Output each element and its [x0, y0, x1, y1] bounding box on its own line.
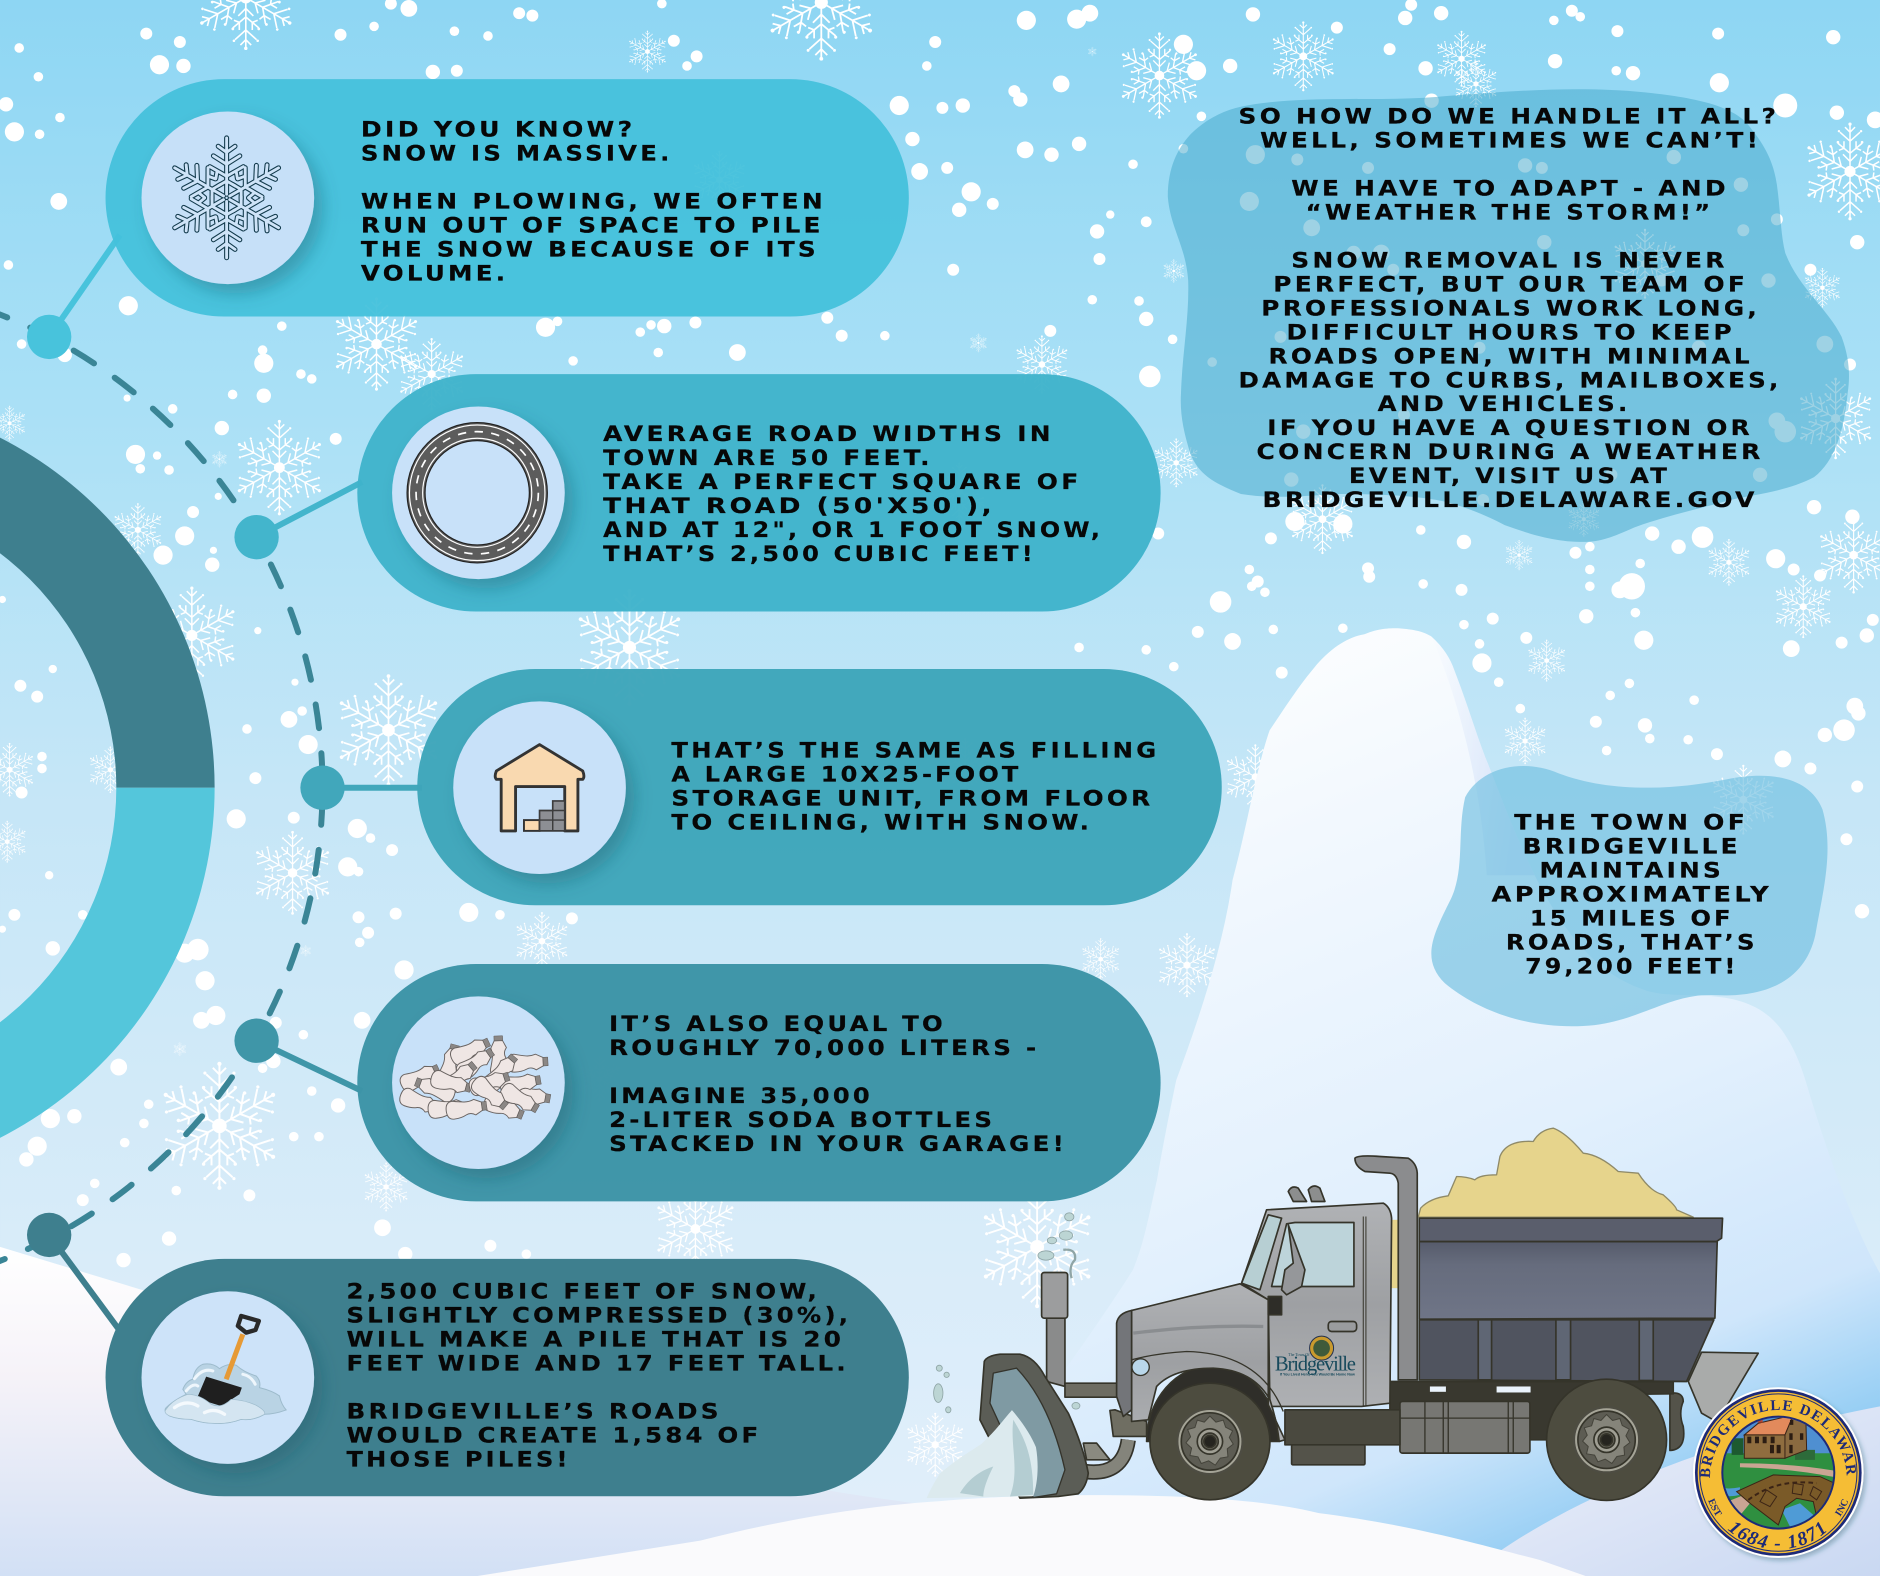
text: road widths: THAT ROAD (50'X50'), — [603, 494, 995, 519]
panel: soda bottles — [357, 964, 1161, 1201]
headlight — [1132, 1359, 1149, 1375]
text: how we handle it: “WEATHER THE STORM!” — [1306, 200, 1713, 225]
panel: road widths — [357, 374, 1161, 611]
seal text est: EST — [1708, 1498, 1722, 1516]
text: storage unit: TO CEILING, WITH SNOW. — [671, 811, 1092, 836]
mirror — [1282, 1225, 1305, 1295]
text: how we handle it: PERFECT, BUT OUR TEAM OF — [1273, 272, 1748, 297]
text: road widths: AVERAGE ROAD WIDTHS IN — [603, 422, 1054, 447]
hopper lower — [1419, 1320, 1714, 1381]
text: how we handle it: DAMAGE TO CURBS, MAILBOXES, — [1239, 368, 1782, 393]
text: soda bottles — [609, 1012, 1067, 1157]
text: town roads: 15 MILES OF — [1530, 907, 1734, 932]
frame and step — [1285, 1410, 1400, 1445]
text: soda bottles: IMAGINE 35,000 — [609, 1084, 873, 1109]
text: did you know — [361, 118, 826, 287]
dump bed rim — [1419, 1218, 1723, 1241]
text: did you know: RUN OUT OF SPACE TO PILE — [361, 214, 824, 239]
text: how we handle it — [1239, 104, 1782, 513]
hydraulic pipe — [1085, 1440, 1128, 1472]
text: did you know: SNOW IS MASSIVE. — [361, 142, 673, 167]
door logo — [1275, 1336, 1356, 1376]
text: did you know: WHEN PLOWING, WE OFTEN — [361, 190, 826, 215]
text: road widths: TAKE A PERFECT SQUARE OF — [603, 470, 1081, 495]
cab — [1242, 1203, 1392, 1406]
text: how we handle it: ROADS OPEN, WITH MINIMAL — [1269, 344, 1753, 369]
yellow load behind cab — [1390, 1220, 1403, 1288]
text: how we handle it: IF YOU HAVE A QUESTION OR — [1267, 416, 1753, 441]
door handle — [1328, 1321, 1357, 1331]
text: snow piles: SLIGHTLY COMPRESSED (30%), — [347, 1303, 851, 1328]
panel: how we handle it — [1168, 89, 1849, 542]
fender line — [1132, 1351, 1283, 1411]
text: how we handle it: PROFESSIONALS WORK LONG, — [1261, 296, 1760, 321]
text: how we handle it: AND VEHICLES. — [1378, 392, 1631, 417]
rear wheel — [1547, 1379, 1667, 1500]
dump bed body — [1419, 1241, 1717, 1319]
text: how we handle it: BRIDGEVILLE.DELAWARE.GOV — [1263, 488, 1758, 513]
icon: storage unit — [453, 701, 626, 874]
snow spray — [934, 1213, 1080, 1413]
dashed timeline arc — [0, 279, 323, 1296]
door logo: Bridgeville — [1275, 1353, 1356, 1375]
text: road widths: THAT’S 2,500 CUBIC FEET! — [603, 542, 1036, 567]
snow plow truck — [927, 1128, 1758, 1500]
text: town roads: ROADS, THAT’S — [1506, 931, 1758, 956]
front wheel — [1150, 1383, 1270, 1500]
text: snow piles: FEET WIDE AND 17 FEET TALL. — [347, 1351, 849, 1376]
snow hill left — [0, 1247, 959, 1576]
door line — [1363, 1216, 1366, 1406]
windshield — [1242, 1215, 1282, 1290]
bed ribs — [1478, 1320, 1653, 1380]
text: town roads: 79,200 FEET! — [1525, 955, 1739, 980]
body and hood — [1132, 1284, 1285, 1441]
icon: shovel in snow — [141, 1291, 314, 1464]
panel: did you know — [106, 79, 909, 317]
town seal — [1692, 1387, 1868, 1563]
horns — [1288, 1186, 1325, 1201]
ring chart top half — [0, 395, 215, 788]
text: soda bottles: 2-LITER SODA BOTTLES — [609, 1108, 995, 1133]
text: how we handle it: EVENT, VISIT US AT — [1349, 464, 1670, 489]
panel: snow piles — [106, 1259, 909, 1496]
door logo: If You Lived Here, You Would Be Home Now — [1280, 1372, 1355, 1376]
panel: storage unit — [417, 669, 1222, 905]
text: snow piles: WOULD CREATE 1,584 OF — [347, 1423, 761, 1448]
text: town roads: MAINTAINS — [1539, 859, 1724, 884]
exhaust stack — [1355, 1156, 1417, 1380]
connector nodes — [27, 235, 422, 1331]
fuel tank — [1400, 1401, 1530, 1453]
text: snow piles: BRIDGEVILLE’S ROADS — [347, 1399, 722, 1424]
seal text top: BRIDGEVILLE DELAWARE — [1700, 1400, 1856, 1478]
text: how we handle it: CONCERN DURING A WEATHER — [1257, 440, 1764, 465]
text: storage unit — [671, 739, 1159, 836]
snow hill right — [1487, 1406, 1880, 1576]
text: town roads: THE TOWN OF — [1514, 811, 1748, 836]
icon: snowflake — [141, 112, 314, 284]
spreader — [1688, 1352, 1758, 1420]
text: storage unit: THAT’S THE SAME AS FILLING — [671, 739, 1159, 764]
ring chart bottom half — [0, 788, 215, 1181]
text: town roads: BRIDGEVILLE — [1523, 835, 1741, 860]
side window — [1272, 1222, 1354, 1286]
text: how we handle it: SNOW REMOVAL IS NEVER — [1291, 248, 1728, 273]
text: how we handle it: WE HAVE TO ADAPT - AND — [1291, 176, 1729, 201]
text: snow piles: WILL MAKE A PILE THAT IS 20 — [347, 1327, 844, 1352]
text: soda bottles: ROUGHLY 70,000 LITERS - — [609, 1036, 1040, 1061]
text: road widths — [603, 422, 1103, 567]
icon: road ring — [392, 406, 565, 579]
snow hill center — [474, 1495, 1587, 1576]
yellow load — [1418, 1128, 1693, 1217]
chassis — [1390, 1381, 1673, 1440]
text: town roads: APPROXIMATELY — [1492, 883, 1772, 908]
text: snow piles: THOSE PILES! — [347, 1447, 571, 1472]
text: how we handle it: WELL, SOMETIMES WE CAN’T! — [1260, 128, 1761, 153]
snow pile — [927, 1410, 1038, 1498]
plow blade — [980, 1354, 1088, 1498]
door logo: The Town Of — [1288, 1352, 1310, 1357]
seal scene — [1723, 1418, 1834, 1528]
text: soda bottles: STACKED IN YOUR GARAGE! — [609, 1132, 1067, 1157]
text: did you know: VOLUME. — [361, 262, 508, 287]
plow post — [1047, 1316, 1065, 1386]
text: snow piles — [347, 1279, 851, 1472]
text: town roads — [1492, 811, 1772, 980]
seal text inc: INC — [1834, 1499, 1848, 1517]
text: road widths: AND AT 12", OR 1 FOOT SNOW, — [603, 518, 1103, 543]
text: how we handle it: SO HOW DO WE HANDLE IT ALL? — [1239, 104, 1779, 129]
text: snow piles: 2,500 CUBIC FEET OF SNOW, — [347, 1279, 820, 1304]
mountain ridge shading — [1432, 637, 1535, 875]
text: road widths: TOWN ARE 50 FEET. — [603, 446, 933, 471]
wheel arch — [1147, 1366, 1278, 1441]
seal text years: 1684 - 1871 — [1728, 1522, 1826, 1548]
text: storage unit: A LARGE 10X25-FOOT — [671, 763, 1022, 788]
snow mountain — [959, 628, 1880, 1575]
plow arm — [1065, 1383, 1118, 1397]
panel: town roads — [1431, 766, 1828, 1026]
text: did you know: DID YOU KNOW? — [361, 118, 635, 143]
icon: bottle pile — [392, 996, 565, 1169]
mud flap — [1670, 1393, 1684, 1450]
text: storage unit: STORAGE UNIT, FROM FLOOR — [671, 787, 1153, 812]
text: how we handle it: DIFFICULT HOURS TO KEEP — [1287, 320, 1735, 345]
text: soda bottles: IT’S ALSO EQUAL TO — [609, 1012, 946, 1037]
grille — [1117, 1310, 1132, 1416]
text: did you know: THE SNOW BECAUSE OF ITS — [361, 238, 819, 263]
